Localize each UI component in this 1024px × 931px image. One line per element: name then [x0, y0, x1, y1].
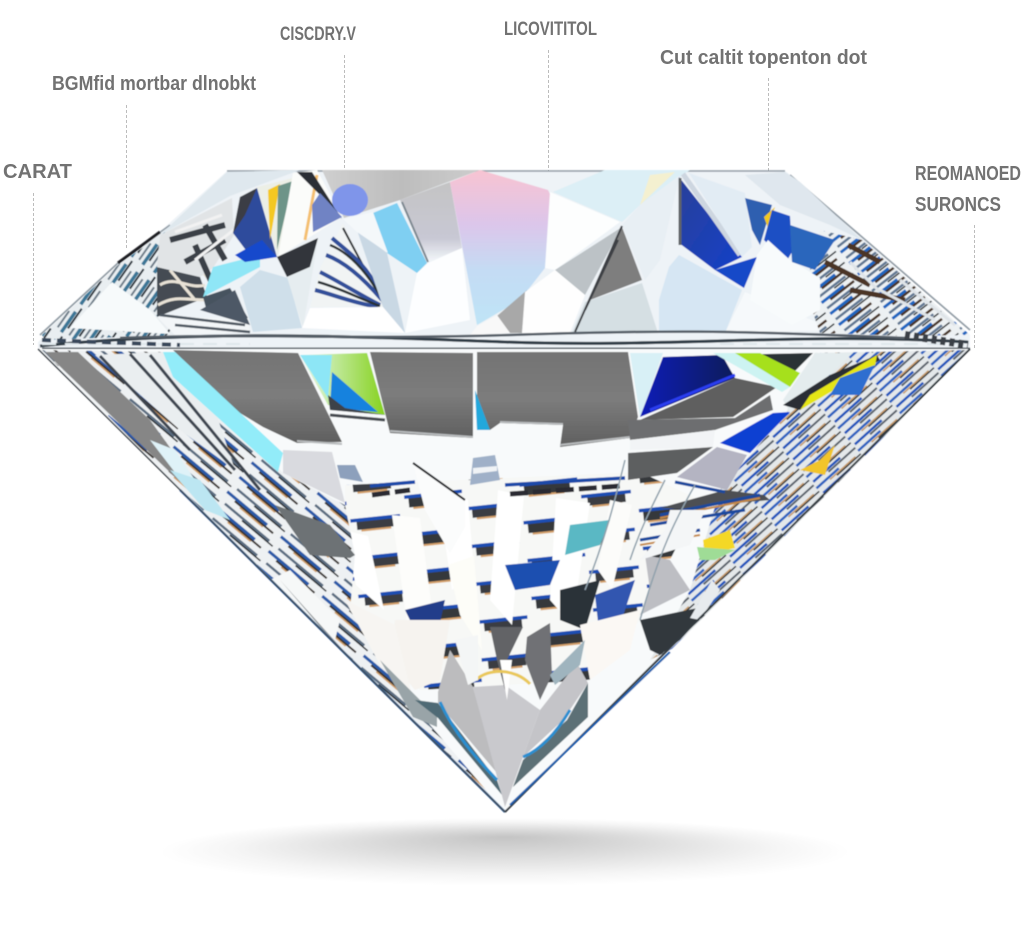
label: brand name: BGMfid mortbar dlnobkt [52, 73, 256, 95]
label: surongs: SURONCS [915, 194, 1001, 216]
diamond pavilion [36, 349, 972, 830]
crown right-center facets [522, 170, 835, 333]
pavilion outside mask [36, 349, 972, 830]
pavilion left stripes [42, 350, 505, 812]
pavilion large grey facets [173, 350, 638, 447]
crown left pale facets [160, 170, 300, 235]
diamond crown [38, 170, 970, 349]
pavilion right stripes [585, 350, 968, 660]
label: cut: Cut caltit topenton dot [660, 47, 867, 69]
crown right cluster [745, 172, 970, 336]
pavilion center pattern [337, 455, 700, 690]
pavilion right top facets [628, 353, 813, 480]
ground shadow [160, 818, 850, 886]
pavilion outer edges [38, 349, 970, 812]
girdle [40, 332, 970, 349]
crown base [38, 171, 970, 348]
crown lilac blue blotch [332, 184, 368, 216]
crown left radial cluster [42, 198, 250, 340]
label: location: LICOVITITOL [504, 19, 597, 40]
crown outer edge [40, 171, 970, 335]
leader lines [34, 50, 974, 350]
pavilion base [38, 349, 970, 812]
crown table band [322, 170, 480, 218]
crown left colored facets [200, 170, 342, 332]
pavilion tip petals [380, 623, 588, 807]
crown center facets [302, 170, 553, 335]
label: carat: CARAT [3, 161, 72, 183]
label: clarity: CISCDRY.V [280, 24, 356, 45]
crown striped triangle [310, 223, 384, 307]
diamond [36, 170, 972, 830]
pavilion left cyan band [163, 352, 283, 472]
pavilion cyan and green facets [300, 353, 490, 430]
pavilion pale left facet [283, 450, 345, 503]
